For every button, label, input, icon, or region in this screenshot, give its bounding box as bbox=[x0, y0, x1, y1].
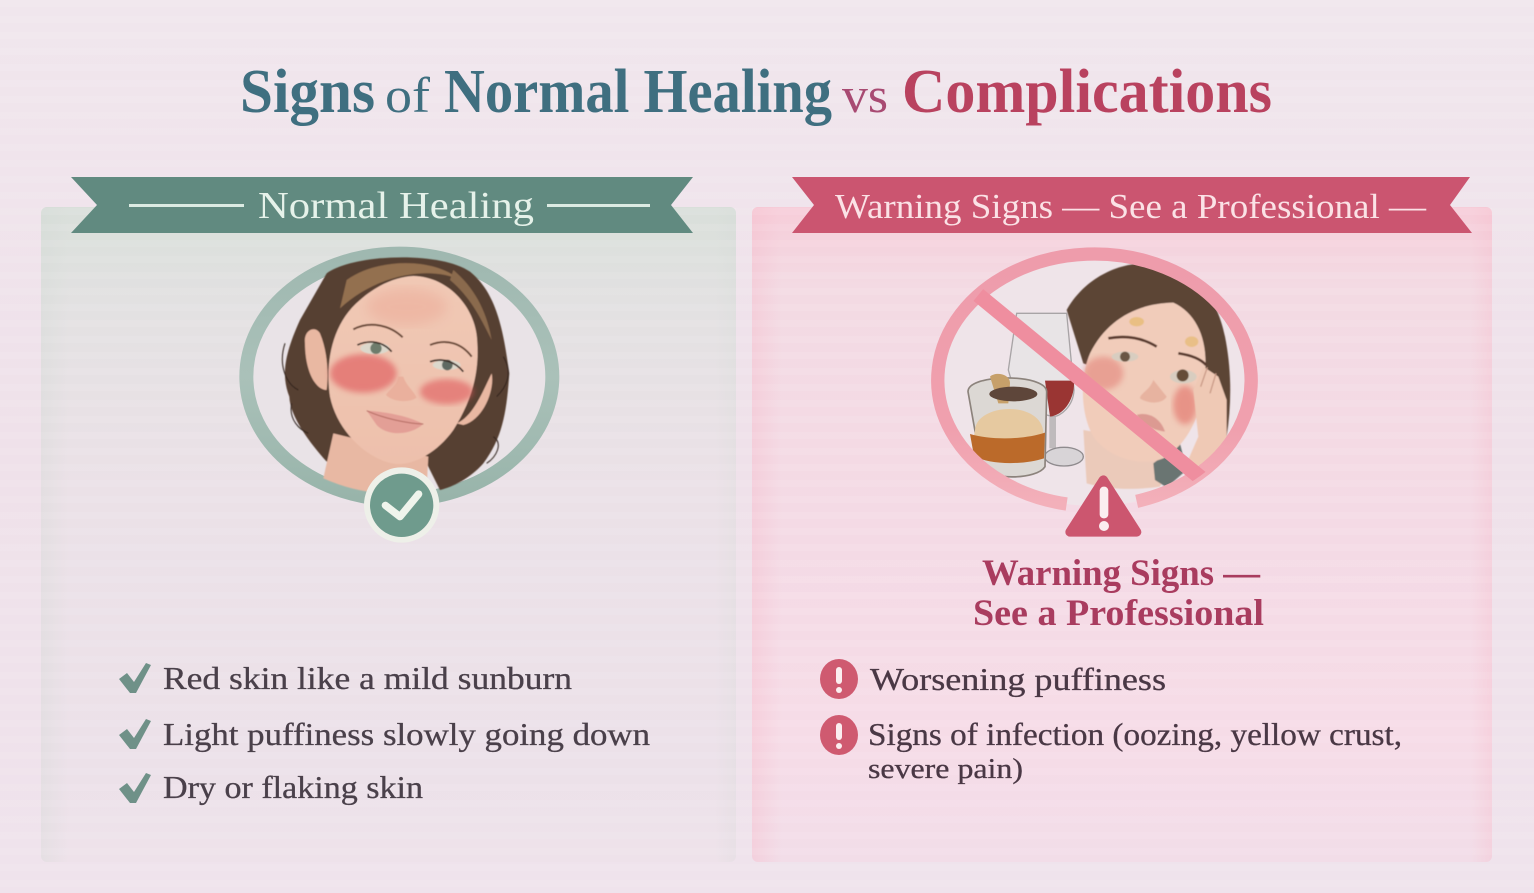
panel: normal healing bbox=[41, 177, 736, 862]
title: of bbox=[385, 67, 430, 123]
item: signs of infection: Signs of infection (oozing, yellow crust, bbox=[868, 716, 1402, 752]
title: vs bbox=[842, 67, 888, 123]
illustration: complications face with alcohol bbox=[937, 254, 1251, 532]
icon: whiskey tumbler bbox=[968, 374, 1047, 477]
title: Signs bbox=[240, 58, 375, 126]
item: red skin: Red skin like a mild sunburn bbox=[163, 660, 572, 696]
ring and slash bbox=[938, 254, 1251, 504]
subheading: warning signs: Warning Signs — bbox=[982, 553, 1261, 594]
panel background: warning signs bbox=[752, 207, 1492, 862]
item: dry skin: Dry or flaking skin bbox=[163, 769, 423, 805]
icon: check badge bbox=[364, 467, 439, 543]
item: worsening puffiness bbox=[820, 659, 1166, 699]
subheading: warning signs bbox=[973, 553, 1264, 634]
item: light puffiness: Light puffiness slowly going down bbox=[163, 716, 650, 752]
illustration: healthy healing face bbox=[246, 254, 552, 543]
icon: warning triangle bbox=[1070, 480, 1137, 532]
subheading: warning signs: See a Professional bbox=[973, 593, 1264, 634]
ribbon: warning signs: Warning Signs — See a Professional — bbox=[835, 187, 1427, 226]
item: signs of infection bbox=[820, 715, 1402, 785]
panel: warning signs bbox=[752, 177, 1492, 862]
item: signs of infection: severe pain) bbox=[868, 753, 1023, 785]
title: Normal Healing bbox=[444, 58, 832, 126]
panel background: normal healing bbox=[41, 207, 736, 862]
ribbon: normal healing: Normal Healing bbox=[258, 185, 534, 227]
ribbon: warning signs bbox=[792, 177, 1472, 233]
ribbon: normal healing bbox=[71, 177, 693, 233]
portrait bbox=[1067, 263, 1230, 489]
list: warning signs bbox=[820, 659, 1402, 785]
portrait bbox=[282, 257, 509, 493]
title bbox=[240, 58, 1272, 126]
title: Complications bbox=[902, 58, 1272, 126]
ring bbox=[246, 254, 552, 500]
item: worsening puffiness: Worsening puffiness bbox=[870, 661, 1166, 697]
list: normal healing signs bbox=[119, 660, 650, 805]
icon: wine glass bbox=[1008, 313, 1083, 466]
